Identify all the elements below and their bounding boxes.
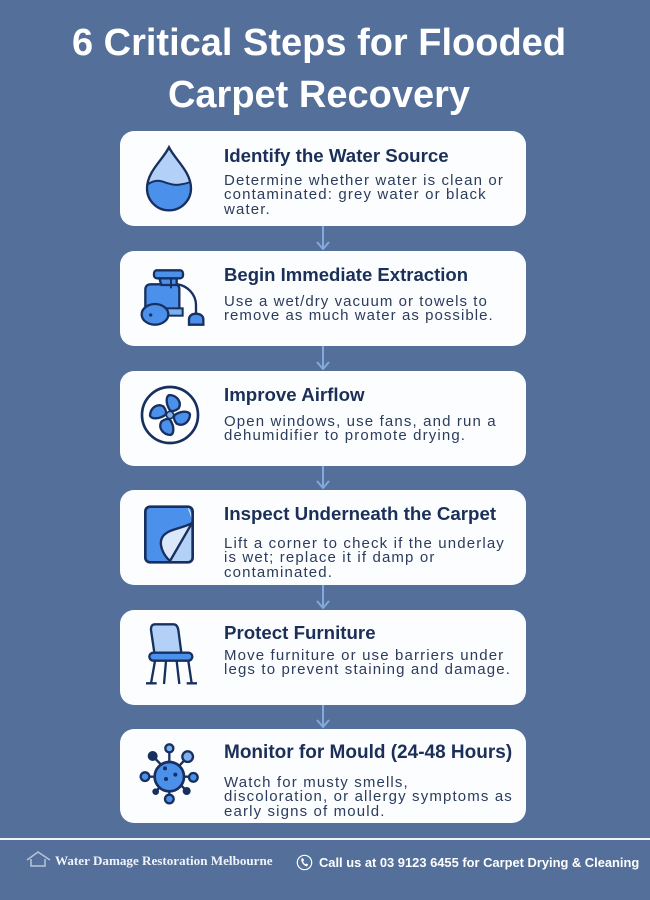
heading: Protect Furniture (224, 622, 376, 642)
phone text: Call us at 03 9123 6455 for Carpet Drying & Cleaning (319, 855, 639, 870)
icon: chair (146, 623, 197, 684)
icon: fan (140, 386, 200, 444)
arrow 3 (316, 466, 330, 490)
arrow 5 (316, 705, 330, 728)
arrow 2 (316, 346, 330, 370)
text: Use a wet/dry vacuum or towels to (224, 292, 488, 310)
panel: identify the water source (120, 131, 526, 226)
text: water. (224, 200, 271, 218)
panel: monitor for mould (120, 729, 526, 823)
heading: Inspect Underneath the Carpet (224, 502, 496, 524)
heading: Begin Immediate Extraction (224, 264, 468, 284)
title: 6 Critical Steps for Flooded (72, 22, 566, 64)
icon: house (26, 851, 50, 867)
text: Watch for musty smells, (224, 774, 409, 790)
arrow 1 (316, 226, 330, 250)
text: contaminated. (224, 564, 333, 580)
text (224, 172, 504, 218)
panel: inspect underneath the carpet (120, 490, 526, 585)
footer logo and company name (26, 851, 273, 868)
text: dehumidifier to promote drying. (224, 427, 466, 444)
company name: Water Damage Restoration Melbourne (55, 853, 273, 868)
icon: wet/dry vacuum (140, 269, 204, 326)
icon: phone (296, 854, 312, 870)
panel: improve airflow (120, 371, 526, 466)
text: is wet; replace it if damp or (224, 549, 435, 566)
text: remove as much water as possible. (224, 307, 494, 324)
heading: Identify the Water Source (224, 144, 449, 166)
title (72, 22, 566, 116)
icon: carpet corner (144, 505, 194, 564)
icon: water drop (146, 144, 192, 212)
icon: mould spore (140, 743, 199, 804)
text: legs to prevent staining and damage. (224, 661, 511, 678)
heading: Improve Airflow (224, 384, 365, 404)
text: Determine whether water is clean or (224, 172, 504, 188)
arrow 4 (316, 585, 330, 610)
text (224, 646, 511, 678)
footer call to action (296, 854, 639, 870)
text: discoloration, or allergy symptoms as (224, 788, 513, 805)
text (224, 412, 497, 444)
text (224, 774, 513, 820)
title: Carpet Recovery (168, 74, 470, 116)
panel: begin immediate extraction (120, 251, 526, 346)
panel: protect furniture (120, 610, 526, 705)
text (224, 534, 505, 580)
text: Lift a corner to check if the underlay (224, 534, 505, 552)
text: early signs of mould. (224, 802, 386, 820)
text: Open windows, use fans, and run a (224, 412, 497, 430)
text: contaminated: grey water or black (224, 186, 487, 203)
text: Move furniture or use barriers under (224, 646, 504, 664)
heading: Monitor for Mould (24-48 Hours) (224, 742, 512, 762)
text (224, 292, 494, 324)
